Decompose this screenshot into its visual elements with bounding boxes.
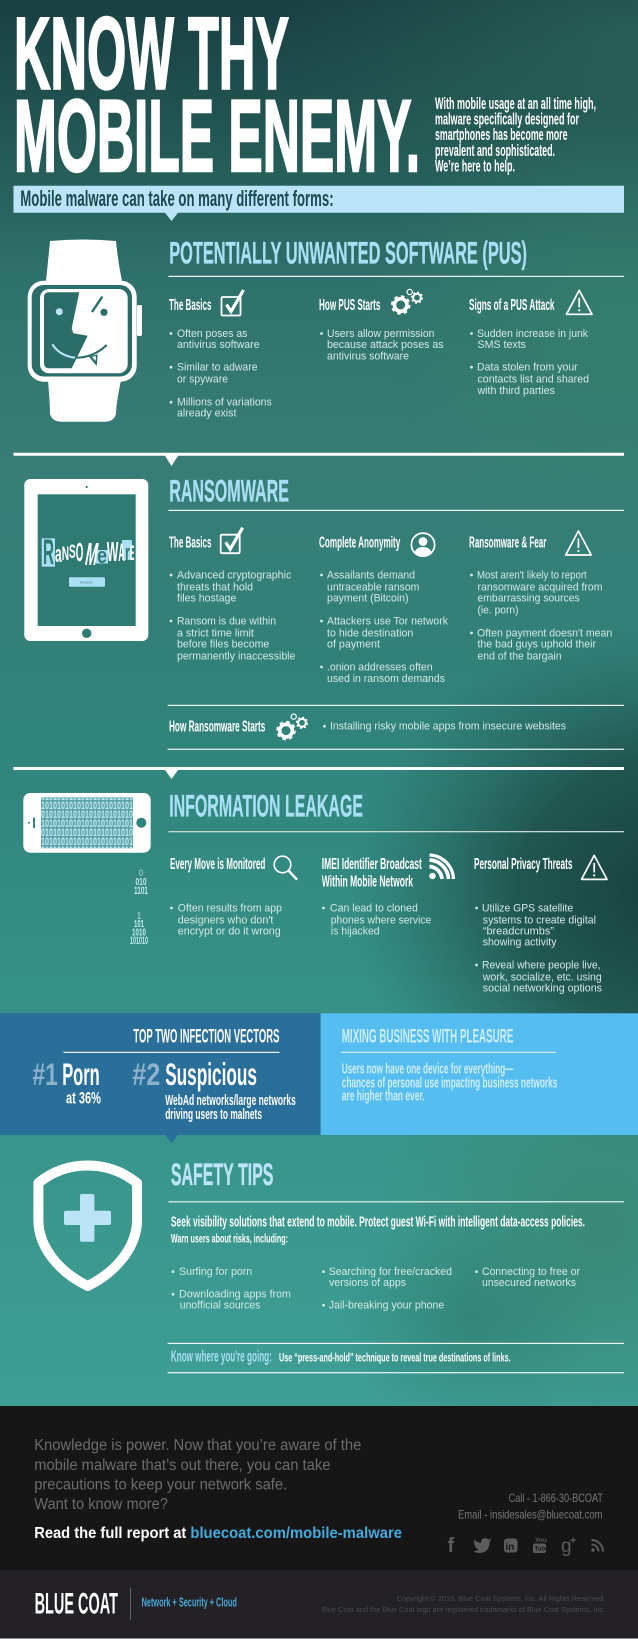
text: privacy bullets: Utilize GPS satellite	[482, 902, 573, 914]
text: contact details: Email - insidesales@bluecoat.com	[458, 1507, 603, 1521]
text: safety column 2: versions of apps	[329, 1277, 407, 1289]
text: privacy bullets: “breadcrumbs”	[483, 926, 554, 938]
icons: social media	[448, 1535, 603, 1557]
panel: safety tips	[38, 1156, 624, 1373]
text: IMEI bullets: Can lead to cloned	[330, 902, 418, 914]
text: anonymity bullets: untraceable ransom	[327, 581, 419, 593]
callout: how ransomware starts: How Ransomware Starts	[169, 719, 265, 736]
icon: tablet with ransom note: N	[62, 544, 69, 565]
icon: tablet with ransom note: O	[76, 537, 83, 567]
text: monitored bullets: encrypt or do it wrong	[178, 926, 281, 938]
icons: social media: You	[535, 1537, 547, 1544]
text: read the full report: Read the full report at	[34, 1525, 186, 1542]
text: fear bullets: embarrassing sources	[478, 592, 580, 604]
icon: binary drops: 101	[134, 919, 144, 930]
vector 2: suspicious: Suspicious	[165, 1056, 257, 1092]
text: copyright: Copyright © 2015, Blue Coat Systems, Inc. All Rights Reserved.	[397, 1594, 605, 1603]
subheading: signs of a PUS attack: Signs of a PUS Attack	[469, 297, 555, 314]
icon: tablet with ransom note: W	[107, 536, 119, 567]
text: how PUS starts bullets	[320, 328, 444, 362]
text: anonymity bullets: payment (Bitcoin)	[327, 592, 408, 604]
subheading: complete anonymity	[319, 533, 435, 556]
text: fear bullets: ransomware acquired from	[478, 581, 602, 593]
icon: tablet with ransom note: M	[83, 536, 101, 572]
text: basics bullets: or spyware	[177, 374, 228, 386]
icon: binary drops: 0	[139, 868, 143, 878]
icon: binary drops: 1101	[134, 885, 148, 897]
text: read the full report	[34, 1525, 402, 1542]
icon: phone with binary screen: 01010101010101010101010	[41, 845, 133, 857]
text: basics bullets	[170, 328, 272, 420]
text: safety column 1: Downloading apps from	[179, 1289, 291, 1301]
text: fear bullets: Often payment doesn't mean	[477, 627, 612, 639]
icon: phone with binary screen: 01010101010101010101010	[41, 809, 133, 821]
text: anonymity bullets: Attackers use Tor network	[327, 615, 449, 627]
text: safety column 3: Connecting to free or	[482, 1266, 580, 1278]
subheading: every move is monitored: Every Move is Monitored	[170, 856, 265, 873]
text: fear bullets: Most aren't likely to report	[477, 569, 587, 581]
text: knowledge is power: mobile malware that’s out there, you can take	[34, 1457, 330, 1474]
text: privacy bullets: systems to create digital	[483, 914, 596, 926]
text: safety column 3	[475, 1266, 580, 1289]
text: fear bullets	[470, 569, 612, 662]
intro text	[435, 94, 596, 176]
text: safety column 2: Jail-breaking your phone	[329, 1300, 444, 1312]
text: knowledge is power: Want to know more?	[34, 1496, 168, 1513]
icons: social media: +	[570, 1535, 576, 1547]
text: IMEI bullets: is hijacked	[331, 926, 380, 938]
subheading: the basics: The Basics	[169, 534, 212, 552]
icon: tablet with ransom note	[24, 479, 148, 641]
text: how PUS starts bullets: antivirus software	[327, 350, 409, 362]
text: signs bullets: Sudden increase in junk	[477, 328, 589, 340]
text: anonymity bullets: to hide destination	[327, 627, 413, 639]
text: copyright	[321, 1594, 605, 1614]
subheading: how PUS starts: How PUS Starts	[319, 297, 380, 314]
title	[14, 0, 420, 193]
divider arrow	[14, 767, 624, 779]
panel: footer brand bar	[0, 1570, 638, 1639]
heading: information leakage: INFORMATION LEAKAGE	[169, 788, 363, 824]
heading: safety tips: SAFETY TIPS	[171, 1156, 273, 1192]
panel: footer brand bar: BLUE COAT	[35, 1587, 118, 1620]
subheading: every move is monitored	[170, 856, 297, 880]
icon: tablet with ransom note: Accept	[80, 580, 93, 584]
text: copyright: Blue Coat and the Blue Coat logo are registered trademarks of Blue Coat Systems, Inc.	[321, 1605, 605, 1614]
icons: social media: g	[561, 1536, 572, 1557]
text: IMEI bullets: phones where service	[331, 914, 431, 926]
panel: potentially unwanted software	[28, 234, 624, 422]
subheading: the basics	[169, 290, 244, 316]
vector 1: porn: at 36%	[66, 1088, 101, 1107]
vector 1: porn: Porn	[62, 1056, 100, 1092]
text: mixing business paragraph: are higher than ever.	[342, 1088, 425, 1105]
subheading: the basics: The Basics	[169, 297, 212, 314]
text: signs bullets: Data stolen from your	[477, 362, 578, 374]
panel: top two infection vectors	[0, 1013, 321, 1143]
banner: mobile malware forms: Mobile malware can take on many different forms:	[20, 186, 334, 211]
text: basics bullets: permanently inaccessible	[177, 650, 295, 662]
icon: phone with binary screen	[23, 791, 151, 857]
text: privacy bullets: social networking options	[483, 983, 603, 995]
text: basics bullets: Ransom is due within	[177, 615, 276, 627]
text: how PUS starts bullets: because attack poses as	[327, 339, 444, 351]
text: anonymity bullets: .onion addresses often	[327, 661, 432, 673]
icon: tablet with ransom note: r	[125, 540, 130, 565]
icons: social media: f	[448, 1535, 454, 1557]
text: privacy bullets: work, socialize, etc. using	[482, 972, 602, 984]
vector 1: porn	[32, 1056, 101, 1107]
text: basics bullets: already exist	[177, 408, 236, 420]
subheading: ransomware and fear: Ransomware & Fear	[469, 534, 546, 552]
text: privacy bullets	[475, 902, 603, 995]
subheading: the basics	[169, 528, 243, 553]
text: basics bullets: Advanced cryptographic	[177, 569, 292, 581]
icon: tablet with ransom note: e	[97, 543, 107, 568]
panel: top two infection vectors: TOP TWO INFECTION VECTORS	[133, 1027, 280, 1048]
panel: information leakage	[23, 788, 624, 995]
text: tagline: Network + Security + Cloud	[142, 1596, 237, 1610]
banner: mobile malware forms	[14, 186, 624, 221]
callout: how ransomware starts	[169, 714, 567, 739]
text: basics bullets: threats that hold	[177, 581, 253, 593]
vector 2: suspicious: WebAd networks/large networks	[165, 1092, 296, 1109]
text: knowledge is power: precautions to keep your network safe.	[34, 1476, 287, 1493]
text: anonymity bullets: Assailants demand	[327, 569, 415, 581]
text: signs bullets: contacts list and shared	[478, 374, 589, 386]
icon: tablet with ransom note: R	[43, 533, 54, 572]
icon: tablet with ransom note: A	[118, 539, 125, 567]
panel: ransomware	[24, 473, 624, 750]
vector 2: suspicious: driving users to malnets	[165, 1106, 262, 1123]
subheading: how PUS starts	[319, 289, 422, 314]
icons: social media: in	[506, 1542, 514, 1553]
text: basics bullets	[170, 569, 295, 662]
text: fear bullets: the bad guys uphold their	[478, 638, 596, 650]
icon: binary drops: 010	[136, 877, 147, 888]
text: signs bullets: SMS texts	[478, 339, 527, 351]
text: signs bullets	[470, 328, 589, 397]
text: anonymity bullets	[320, 569, 449, 685]
icon: phone with binary screen: 01010101010101010101010	[41, 791, 133, 803]
panel: information leakage: 101010	[130, 935, 148, 947]
intro text: We’re here to help.	[435, 156, 515, 176]
text: mixing business paragraph	[342, 1060, 557, 1105]
callout: know where you're going: Know where you're going:	[171, 1349, 272, 1366]
icon: tablet with ransom note: a	[55, 541, 62, 568]
icon: phone with binary screen: 10101010101010101010101	[41, 836, 133, 848]
text: safety column 2	[322, 1266, 452, 1312]
text: safety column 2: Searching for free/cracked	[329, 1266, 452, 1278]
text: monitored bullets	[170, 902, 282, 938]
text: monitored bullets: Often results from app	[178, 902, 282, 914]
text: contact details	[458, 1491, 604, 1521]
text: safety column 1: Surfing for porn	[179, 1266, 252, 1278]
panel: mixing business with pleasure	[321, 1013, 638, 1135]
text: IMEI bullets	[322, 902, 431, 938]
icon: shield with cross	[38, 1166, 137, 1286]
subheading: signs of a PUS attack	[469, 290, 592, 314]
callout: how ransomware starts: Installing risky mobile apps from insecure websites	[330, 721, 567, 733]
text: safety column 1	[172, 1266, 291, 1312]
vector 1: porn: #1	[32, 1056, 58, 1092]
subheading: ransomware and fear	[469, 531, 591, 555]
text: monitored bullets: designers who don't	[178, 914, 273, 926]
icon: tablet with ransom note: S	[69, 542, 76, 563]
text: fear bullets: (ie. porn)	[478, 604, 518, 616]
icon: phone with binary screen: 01010101010101010101010	[41, 827, 133, 839]
subheading: complete anonymity: Complete Anonymity	[319, 534, 400, 552]
text: basics bullets: Millions of variations	[177, 397, 272, 409]
panel: footer call to action	[0, 1406, 638, 1570]
text: how PUS starts bullets: Users allow permission	[327, 328, 434, 340]
icon: binary drops: 1	[137, 911, 141, 922]
text: privacy bullets: Reveal where people live,	[482, 959, 600, 971]
text: anonymity bullets: used in ransom demands	[327, 673, 446, 685]
icon: phone with binary screen: 10101010101010101010101	[41, 818, 133, 830]
icon: smartwatch with finder face	[28, 240, 142, 422]
text: signs bullets: with third parties	[477, 385, 556, 397]
icon: phone with binary screen: 10101010101010101010101	[41, 800, 133, 812]
text: safety lead	[171, 1214, 585, 1246]
icon: binary drops	[130, 868, 148, 947]
text: basics bullets: before files become	[177, 638, 269, 650]
vector 2: suspicious	[132, 1056, 296, 1123]
icons: social media: Tube	[534, 1546, 549, 1552]
text: privacy bullets: showing activity	[483, 937, 557, 949]
subheading: IMEI identifier broadcast	[322, 855, 454, 891]
text: basics bullets: Similar to adware	[177, 362, 258, 374]
heading: ransomware: RANSOMWARE	[169, 473, 289, 509]
text: knowledge is power: Knowledge is power. Now that you’re aware of the	[34, 1437, 361, 1454]
subheading: IMEI identifier broadcast: Within Mobile Network	[322, 874, 413, 891]
text: read the full report: bluecoat.com/mobile-malware	[190, 1525, 402, 1542]
text: contact details: Call - 1-866-30-BCOAT	[509, 1491, 604, 1505]
subheading: personal privacy threats	[474, 855, 607, 879]
vector 2: suspicious: #2	[132, 1056, 160, 1092]
text: fear bullets: end of the bargain	[478, 650, 562, 662]
text: safety column 1: unofficial sources	[180, 1300, 261, 1312]
text: basics bullets: files hostage	[177, 592, 236, 604]
text: anonymity bullets: of payment	[327, 638, 380, 650]
text: safety lead: Warn users about risks, including:	[171, 1232, 288, 1246]
divider arrow	[14, 453, 624, 466]
text: basics bullets: antivirus software	[177, 339, 260, 351]
icon: tablet with ransom note: E	[130, 542, 134, 565]
text: safety column 3: unsecured networks	[482, 1277, 577, 1289]
callout: know where you're going	[171, 1349, 511, 1366]
subheading: IMEI identifier broadcast: IMEI Identifier Broadcast	[322, 856, 422, 873]
text: basics bullets: a strict time limit	[177, 627, 254, 639]
icon: binary drops: 1010	[132, 926, 146, 938]
text: basics bullets: Often poses as	[177, 328, 248, 340]
text: knowledge is power	[34, 1437, 361, 1513]
